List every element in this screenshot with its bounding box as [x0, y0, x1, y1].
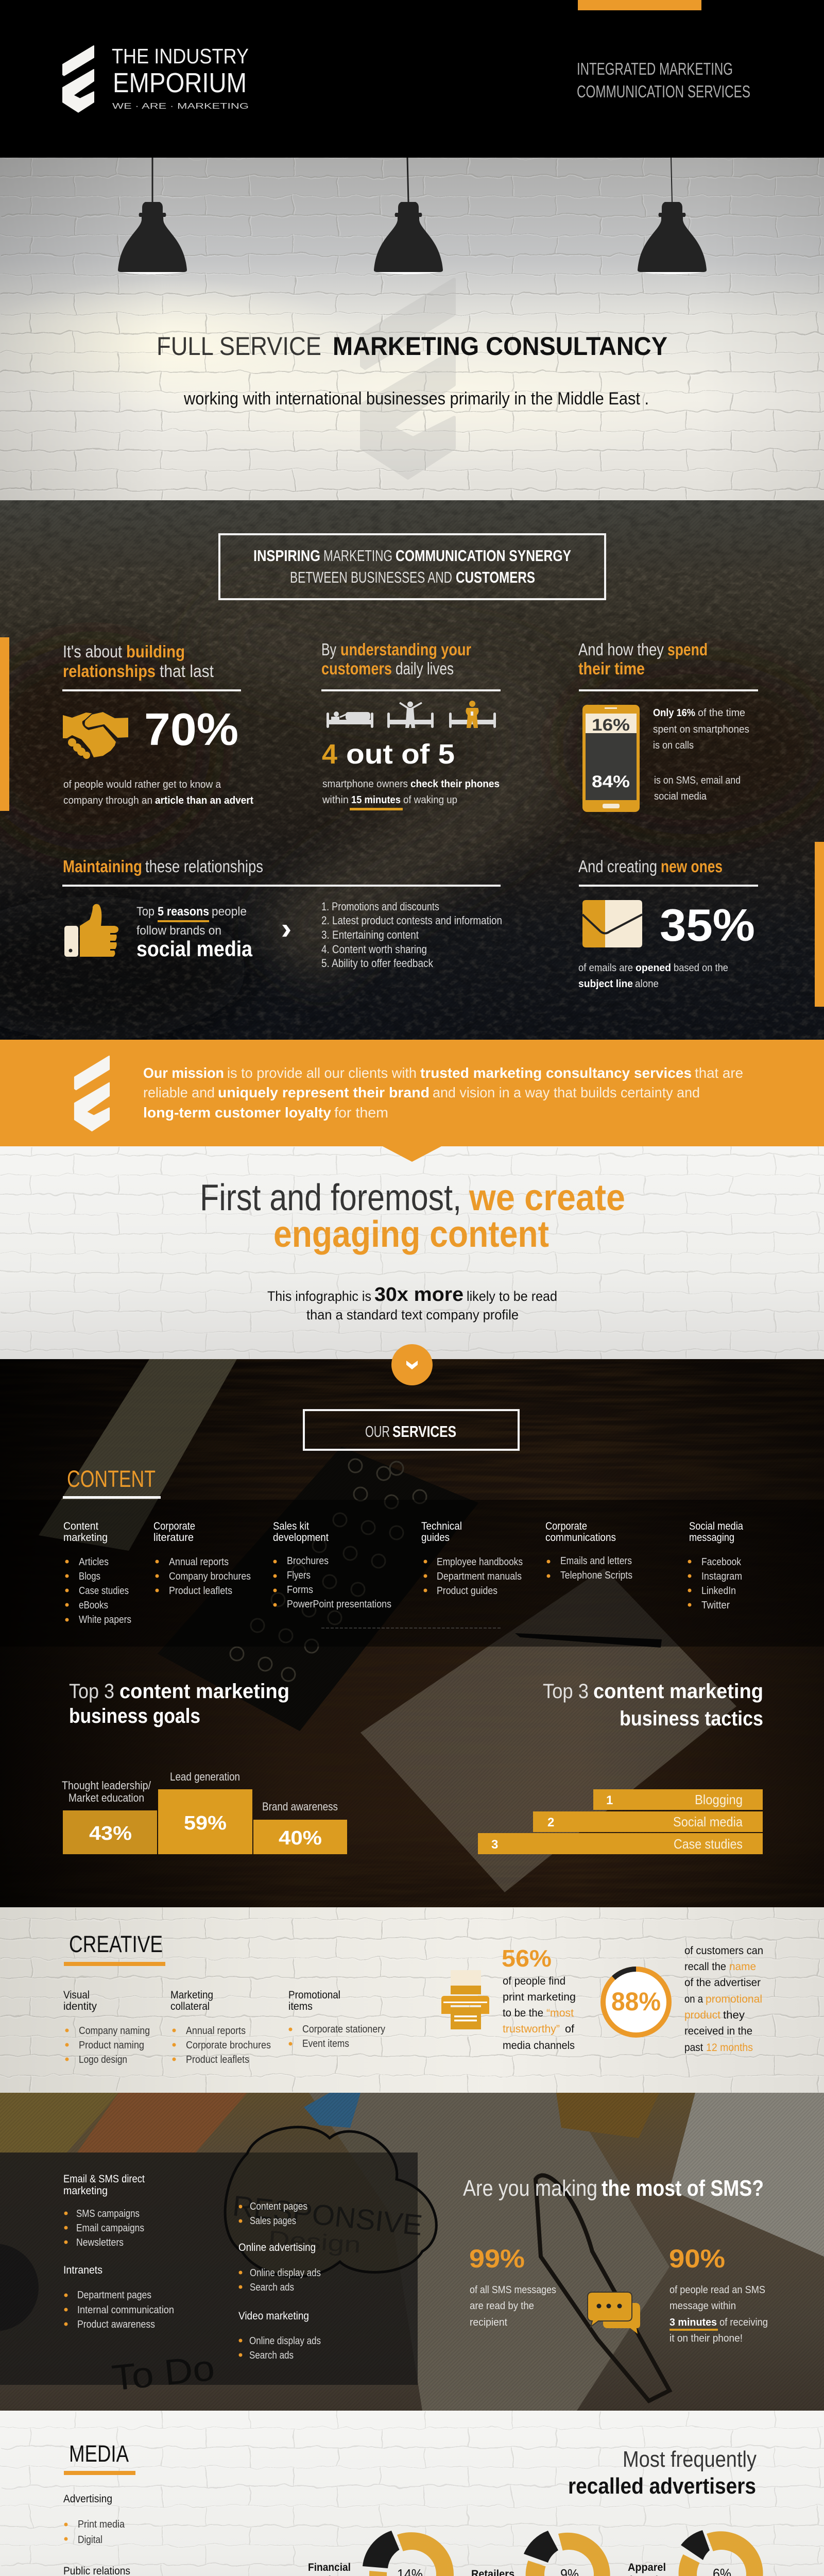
subtext: likely to be read: [467, 1289, 557, 1304]
background: aerial city: [0, 500, 824, 1041]
stat: 56% print marketing: print marketing: [503, 1991, 576, 2003]
text: top 5 reasons: social media: [136, 937, 253, 961]
list: five reasons: 2. Latest product contests and information: [321, 914, 502, 927]
heading box: synergy: INSPIRING: [253, 547, 320, 565]
list: web pages: Sales pages: [250, 2215, 296, 2227]
list: intranets: Department pages: [77, 2290, 151, 2301]
bar chart: business goals: Market education: [68, 1791, 144, 1804]
mission text: Our mission: [143, 1065, 224, 1081]
subtext: 30x more: [374, 1284, 464, 1306]
stat: 90%: of people read an SMS: [670, 2284, 765, 2296]
stat: 99%: recipient: [470, 2317, 507, 2328]
heading: recalled advertisers: Most frequently: [623, 2447, 757, 2472]
heading box: our services: OUR: [365, 1422, 390, 1440]
list: technical guides: Product guides: [437, 1585, 497, 1597]
text: recall: past: [684, 2042, 703, 2054]
logo wordmark: THE INDUSTRY: [112, 44, 249, 68]
circular down button: [391, 1344, 433, 1385]
list: corporate literature: [153, 1520, 251, 1597]
logo mark: [63, 46, 94, 112]
stat: 99%: of all SMS messages: [470, 2284, 556, 2296]
heading: business goals: [69, 1680, 289, 1727]
list: intranets: Intranets: [63, 2264, 102, 2276]
section title: content: CONTENT: [67, 1466, 156, 1492]
heading: business tactics: business tactics: [620, 1707, 763, 1730]
list: video marketing: Search ads: [249, 2350, 294, 2361]
stat: 56% print marketing: 56%: [502, 1945, 552, 1972]
list: corporate literature: Corporate: [153, 1520, 195, 1532]
list: advertising: Digital: [78, 2534, 102, 2546]
list: sales kit development: [273, 1520, 391, 1610]
heading: customers: [321, 659, 392, 678]
list: technical guides: Employee handbooks: [437, 1556, 523, 1568]
hero subtitle: working with international businesses primarily in the Middle East .: [183, 389, 649, 409]
column: building relationships: [62, 642, 253, 806]
list: marketing collateral: Product leaflets: [186, 2054, 249, 2065]
panel: city relationships section: [0, 500, 824, 1041]
heading: [578, 857, 758, 887]
panel: media: [0, 2411, 824, 2576]
list: sales kit development: Sales kit: [273, 1520, 309, 1532]
description: is on calls: [653, 740, 694, 751]
list: web pages: Content pages: [250, 2201, 307, 2212]
section title: media: MEDIA: [69, 2441, 129, 2467]
section title: creative: CREATIVE: [69, 1931, 163, 1957]
heading: these relationships: [145, 857, 263, 876]
stat: 56% print marketing: of people find: [503, 1975, 565, 1987]
list: visual identity: Logo design: [79, 2054, 127, 2065]
list: visual identity: [63, 1989, 150, 2065]
background: desk with sketches: RESPONSIVE: [231, 2189, 424, 2242]
icon: person checking phone: [449, 701, 496, 728]
list: sales kit development: Brochures: [287, 1555, 329, 1567]
description: is on SMS, email and: [654, 775, 741, 786]
bar chart: business tactics: Case studies: [674, 1836, 743, 1852]
heading: business goals: content marketing: [119, 1680, 289, 1703]
donut: financial services 14%: Financial: [308, 2562, 351, 2573]
description: company through an: [63, 795, 152, 806]
panel: our services, content: [0, 1344, 824, 1907]
headline: engaging content: [273, 1214, 549, 1255]
orange tab: [578, 0, 701, 10]
mission text: uniquely represent their brand: [218, 1084, 430, 1100]
text: top 5 reasons: Top: [136, 905, 154, 919]
mission text: for them: [334, 1105, 388, 1121]
list: content marketing: Case studies: [79, 1585, 129, 1597]
list: visual identity: Company naming: [79, 2025, 150, 2037]
text: recall: promotional: [706, 1993, 762, 2005]
pendant lamp left: [118, 158, 187, 274]
heading: business goals: Top 3: [69, 1680, 114, 1703]
stat: 56% print marketing: trustworthy”: [503, 2023, 560, 2035]
stat: 90%: message within: [670, 2300, 736, 2312]
list: email and SMS: Email campaigns: [76, 2223, 144, 2234]
bar chart: business goals: 59%: [184, 1812, 227, 1834]
heading: SMS: [463, 2176, 764, 2201]
icon: stretching person: [387, 702, 434, 728]
stat: 99%: 99%: [469, 2244, 525, 2273]
stat: 90%: [669, 2244, 768, 2344]
list: social media messaging: messaging: [689, 1532, 734, 1544]
icon: sleeping in bed: [327, 711, 373, 728]
list: promotional items: Promotional: [288, 1989, 340, 2001]
list: web pages: [239, 2201, 307, 2227]
list: content marketing: marketing: [63, 1532, 108, 1544]
list: promotional items: [288, 1989, 385, 2049]
heading: recalled advertisers: [568, 2447, 757, 2499]
description: [578, 962, 728, 990]
list: content marketing: Blogs: [79, 1571, 100, 1582]
list: advertising: Advertising: [63, 2493, 112, 2505]
stat: 90%: of receiving: [719, 2317, 768, 2328]
stat: 4 out of 5: 4: [322, 739, 337, 770]
text: recall: of the advertiser: [684, 1977, 761, 1989]
icon: handshake: [63, 711, 129, 759]
donut: 88%: [603, 1969, 669, 2035]
subtext: [267, 1284, 557, 1323]
list: visual identity: Visual: [63, 1989, 90, 2001]
text: recall: of customers can: [684, 1945, 763, 1957]
text: recall: product: [684, 2009, 720, 2021]
list: video marketing: Video marketing: [238, 2310, 309, 2322]
heading: building: [126, 642, 185, 661]
bar chart: business tactics: 1: [606, 1793, 613, 1807]
list: content marketing: Content: [63, 1520, 98, 1532]
list: sales kit development: PowerPoint presentations: [287, 1599, 391, 1610]
section title: media: [64, 2441, 135, 2475]
list: video marketing: [238, 2310, 321, 2361]
donut: apparel brands 6%: [628, 2530, 763, 2576]
list: promotional items: Event items: [302, 2038, 349, 2049]
header tagline: INTEGRATED MARKETING: [577, 59, 733, 78]
heading box: synergy: BETWEEN BUSINESSES AND: [290, 568, 452, 586]
description: Only 16%: [653, 707, 695, 719]
bar chart: business goals: Brand awareness: [262, 1800, 338, 1813]
heading: By: [321, 640, 336, 659]
list: online advertising: Online advertising: [238, 2242, 316, 2253]
heading: [578, 640, 758, 691]
donut: 88%: 88%: [611, 1987, 661, 2016]
list: corporate communications: Emails and letters: [560, 1555, 632, 1567]
list: email and SMS: Newsletters: [76, 2237, 124, 2248]
description: [63, 779, 253, 806]
icon: chat bubbles: [588, 2292, 640, 2334]
hero title: [157, 332, 667, 361]
description: [653, 707, 749, 802]
headline: [200, 1177, 625, 1255]
watermark logo: [362, 279, 454, 478]
subtext: than a standard text company profile: [306, 1307, 519, 1323]
panel: hero brick wall: [0, 158, 824, 500]
logo wordmark: EMPORIUM: [113, 67, 247, 98]
bar chart: business goals: 40%: [279, 1827, 322, 1849]
bar chart: business goals: Lead generation: [170, 1770, 240, 1783]
panel: digital and SMS: [0, 2093, 824, 2411]
heading: their time: [578, 659, 645, 678]
description: of emails are: [578, 962, 633, 974]
description: opened: [636, 962, 671, 974]
heading: SMS: Are you making: [463, 2176, 597, 2201]
header tagline: COMMUNICATION SERVICES: [577, 82, 750, 101]
heading: business tactics: content marketing: [593, 1680, 763, 1703]
list: online advertising: Search ads: [250, 2282, 294, 2293]
stat: 56% print marketing: “most: [546, 2007, 574, 2019]
pointer: [383, 1146, 441, 1162]
stat: 56% print marketing: to be the: [503, 2007, 543, 2019]
description: check their phones: [410, 778, 500, 790]
list: email and SMS: Email & SMS direct: [63, 2173, 145, 2185]
background: typewriter on wood: [0, 1359, 824, 1907]
icon: smartphone 16% / 84%: 16%: [592, 716, 630, 734]
list: five reasons: 5. Ability to offer feedback: [321, 957, 434, 970]
text: top 5 reasons: 5 reasons: [158, 905, 209, 919]
stat: 99%: are read by the: [470, 2300, 534, 2312]
logo wordmark: WE · ARE · MARKETING: [112, 102, 249, 111]
list: intranets: [63, 2264, 174, 2330]
list: promotional items: items: [288, 2001, 313, 2012]
mission text: reliable and: [143, 1084, 215, 1100]
heading: relationships: [63, 662, 156, 681]
list: corporate literature: literature: [153, 1532, 194, 1544]
heading: understanding your: [340, 640, 471, 659]
list: advertising: [63, 2493, 125, 2546]
list: five reasons: 1. Promotions and discounts: [321, 900, 439, 913]
list: corporate communications: Corporate: [545, 1520, 587, 1532]
mission text: is to provide all our clients with: [227, 1065, 417, 1081]
icon: envelope: [582, 900, 642, 947]
panel: creative: [0, 1907, 824, 2093]
bar chart: business tactics: 2: [547, 1816, 554, 1829]
list: corporate literature: Product leaflets: [169, 1585, 232, 1597]
text: recall: [684, 1945, 763, 2054]
list: social media messaging: LinkedIn: [701, 1585, 736, 1597]
heading box: our services: [304, 1410, 519, 1450]
donut: retailers 9%: [471, 2531, 610, 2576]
logo mark: [75, 1056, 109, 1131]
list: five reasons: 4. Content worth sharing: [321, 943, 427, 956]
icon: smartphone 16% / 84%: 84%: [592, 772, 630, 791]
list: five reasons: [321, 900, 502, 970]
heading box: synergy: [219, 534, 605, 599]
list: social media messaging: Social media: [689, 1520, 743, 1532]
description: based on the: [674, 962, 728, 974]
text: recall: 12 months: [706, 2042, 753, 2054]
column: spending time: [578, 640, 758, 812]
list: corporate communications: Telephone Scripts: [560, 1570, 632, 1581]
header tagline: [577, 59, 750, 101]
heading: recalled advertisers: recalled advertisers: [568, 2473, 756, 2499]
description: [322, 778, 500, 810]
donut: financial services 14%: [308, 2531, 454, 2576]
hero title: MARKETING CONSULTANCY: [333, 332, 667, 361]
list: visual identity: Product naming: [79, 2040, 144, 2051]
mission text: [143, 1065, 743, 1121]
list: technical guides: Technical: [421, 1520, 462, 1532]
mission text: trusted marketing consultancy services: [420, 1065, 692, 1081]
list: technical guides: [421, 1520, 523, 1597]
description: social media: [654, 791, 707, 802]
donut: apparel brands 6%: Apparel: [628, 2562, 666, 2573]
section title: content: [63, 1466, 161, 1499]
hero title: FULL SERVICE: [157, 332, 321, 361]
stat: 56% print marketing: [502, 1945, 576, 2052]
list: corporate communications: communications: [545, 1532, 616, 1544]
heading: business tactics: [543, 1680, 763, 1730]
heading: [62, 857, 501, 887]
list: advertising: Print media: [78, 2519, 125, 2530]
list: sales kit development: Forms: [287, 1584, 313, 1596]
list: corporate communications: [545, 1520, 632, 1581]
bar chart: business tactics: Social media: [673, 1814, 743, 1829]
pendant lamp centre: [374, 158, 443, 274]
stat: 99%: [469, 2244, 556, 2328]
list: marketing collateral: Annual reports: [186, 2025, 246, 2037]
heading box: synergy: MARKETING: [323, 547, 392, 565]
heading: that last: [160, 662, 214, 681]
description: within: [322, 794, 349, 806]
mission text: that are: [695, 1065, 743, 1081]
list: technical guides: guides: [421, 1532, 450, 1544]
heading: Maintaining: [63, 857, 142, 876]
bar chart: business goals: [62, 1770, 347, 1854]
headline: we create: [469, 1177, 625, 1218]
stat: 35%: 35%: [660, 900, 755, 951]
panel: page header: [0, 0, 824, 158]
list: marketing collateral: [170, 1989, 271, 2065]
list: sales kit development: development: [273, 1532, 329, 1544]
stat: 56% print marketing: media channels: [503, 2040, 575, 2052]
text: recall: on a: [684, 1993, 703, 2005]
description: alone: [635, 978, 659, 990]
mission text: long-term customer loyalty: [143, 1105, 331, 1121]
list: online advertising: [238, 2242, 321, 2293]
list: corporate literature: Annual reports: [169, 1556, 229, 1568]
list: social media messaging: Facebook: [701, 1556, 742, 1568]
logo wordmark: [112, 44, 249, 111]
list: social media messaging: [688, 1520, 743, 1611]
bar chart: business tactics: [478, 1789, 763, 1854]
list: online advertising: Online display ads: [250, 2267, 321, 2279]
stat: 90%: it on their phone!: [670, 2333, 743, 2344]
text: top 5 reasons: follow brands on: [136, 924, 221, 938]
column: understanding customers: [321, 640, 501, 810]
text: recall: they: [723, 2009, 745, 2021]
heading: It's about: [63, 642, 122, 661]
description: smartphone owners: [322, 778, 408, 790]
heading: business tactics: Top 3: [543, 1680, 589, 1703]
block: maintaining relationships: [62, 857, 502, 970]
list: intranets: Product awareness: [77, 2319, 155, 2330]
list: five reasons: 3. Entertaining content: [321, 928, 419, 941]
section title: creative: [64, 1931, 165, 1966]
heading: And how they: [578, 640, 664, 659]
list: content marketing: eBooks: [79, 1600, 108, 1611]
list: visual identity: identity: [63, 2001, 97, 2012]
heading: spend: [667, 640, 708, 659]
list: email and SMS: marketing: [63, 2185, 108, 2197]
text: recall: recall the: [684, 1961, 726, 1973]
background: desk with sketches: Design: [267, 2226, 362, 2258]
icon: thumbs up: [64, 904, 118, 957]
subtext: This infographic is: [267, 1289, 371, 1304]
stat: 4 out of 5: out of 5: [346, 739, 455, 770]
list: marketing collateral: collateral: [170, 2001, 210, 2012]
description: spent on smartphones: [653, 724, 749, 735]
panel: engaging content brick: [0, 1146, 824, 1359]
text: recall: name: [729, 1961, 756, 1973]
heading: [321, 640, 501, 691]
heading: And creating: [578, 857, 657, 876]
background: desk with sketches: To Do: [110, 2347, 216, 2398]
description: of people would rather get to know a: [63, 779, 221, 790]
description: subject line: [578, 978, 633, 990]
list: email and SMS: [63, 2173, 145, 2248]
text: top 5 reasons: [136, 905, 253, 961]
description: article than an advert: [155, 795, 253, 806]
list: email and SMS: SMS campaigns: [76, 2208, 140, 2219]
stat: 70%: 70%: [144, 704, 238, 755]
list: promotional items: Corporate stationery: [302, 2024, 385, 2035]
bar chart: business goals: 43%: [89, 1823, 132, 1844]
heading: [62, 642, 241, 691]
list: technical guides: Department manuals: [437, 1571, 522, 1582]
description: 15 minutes: [351, 794, 401, 806]
list: intranets: Internal communication: [77, 2304, 174, 2316]
list: social media messaging: Twitter: [701, 1600, 730, 1611]
icon: smartphone 16% / 84%: [582, 705, 640, 812]
headline: First and foremost,: [200, 1177, 461, 1218]
list: marketing collateral: Corporate brochures: [186, 2040, 271, 2051]
list: social media messaging: Instagram: [701, 1571, 742, 1582]
heading box: synergy: COMMUNICATION SYNERGY: [396, 547, 571, 565]
heading: daily lives: [396, 659, 454, 678]
heading box: our services: SERVICES: [392, 1422, 456, 1440]
list: marketing collateral: Marketing: [170, 1989, 213, 2001]
bar chart: business tactics: 3: [491, 1838, 498, 1852]
stat: 90%: 3 minutes: [670, 2317, 717, 2328]
heading box: synergy: CUSTOMERS: [456, 568, 535, 586]
bar chart: business goals: Thought leadership/: [62, 1779, 151, 1792]
icon: printer: [441, 1970, 489, 2029]
text: recall: received in the: [684, 2025, 752, 2037]
description: of waking up: [403, 794, 457, 806]
heading: business goals: business goals: [69, 1705, 200, 1727]
text: top 5 reasons: people: [212, 905, 247, 919]
background: desk with sketches: [0, 2093, 824, 2411]
panel: mission banner: [0, 1040, 824, 1162]
pendant lamp right: [638, 158, 707, 274]
list: video marketing: Online display ads: [249, 2335, 321, 2347]
description: of the time: [698, 707, 745, 719]
heading: new ones: [661, 857, 723, 876]
arrow: chevron right: [282, 925, 290, 937]
stat: 90%: 90%: [669, 2244, 725, 2273]
list: content marketing: [63, 1520, 131, 1625]
list: content marketing: Articles: [79, 1556, 109, 1568]
list: content marketing: White papers: [79, 1614, 131, 1625]
list: sales kit development: Flyers: [287, 1570, 311, 1581]
mission text: and vision in a way that builds certainty and: [433, 1084, 700, 1100]
bar chart: business tactics: Blogging: [695, 1792, 743, 1807]
list: corporate literature: Company brochures: [169, 1571, 251, 1582]
block: creating new relationships: [578, 857, 758, 990]
side accent bars: [0, 637, 824, 1007]
heading: SMS: the most of SMS?: [602, 2176, 764, 2201]
stat: 56% print marketing: of: [565, 2023, 574, 2035]
